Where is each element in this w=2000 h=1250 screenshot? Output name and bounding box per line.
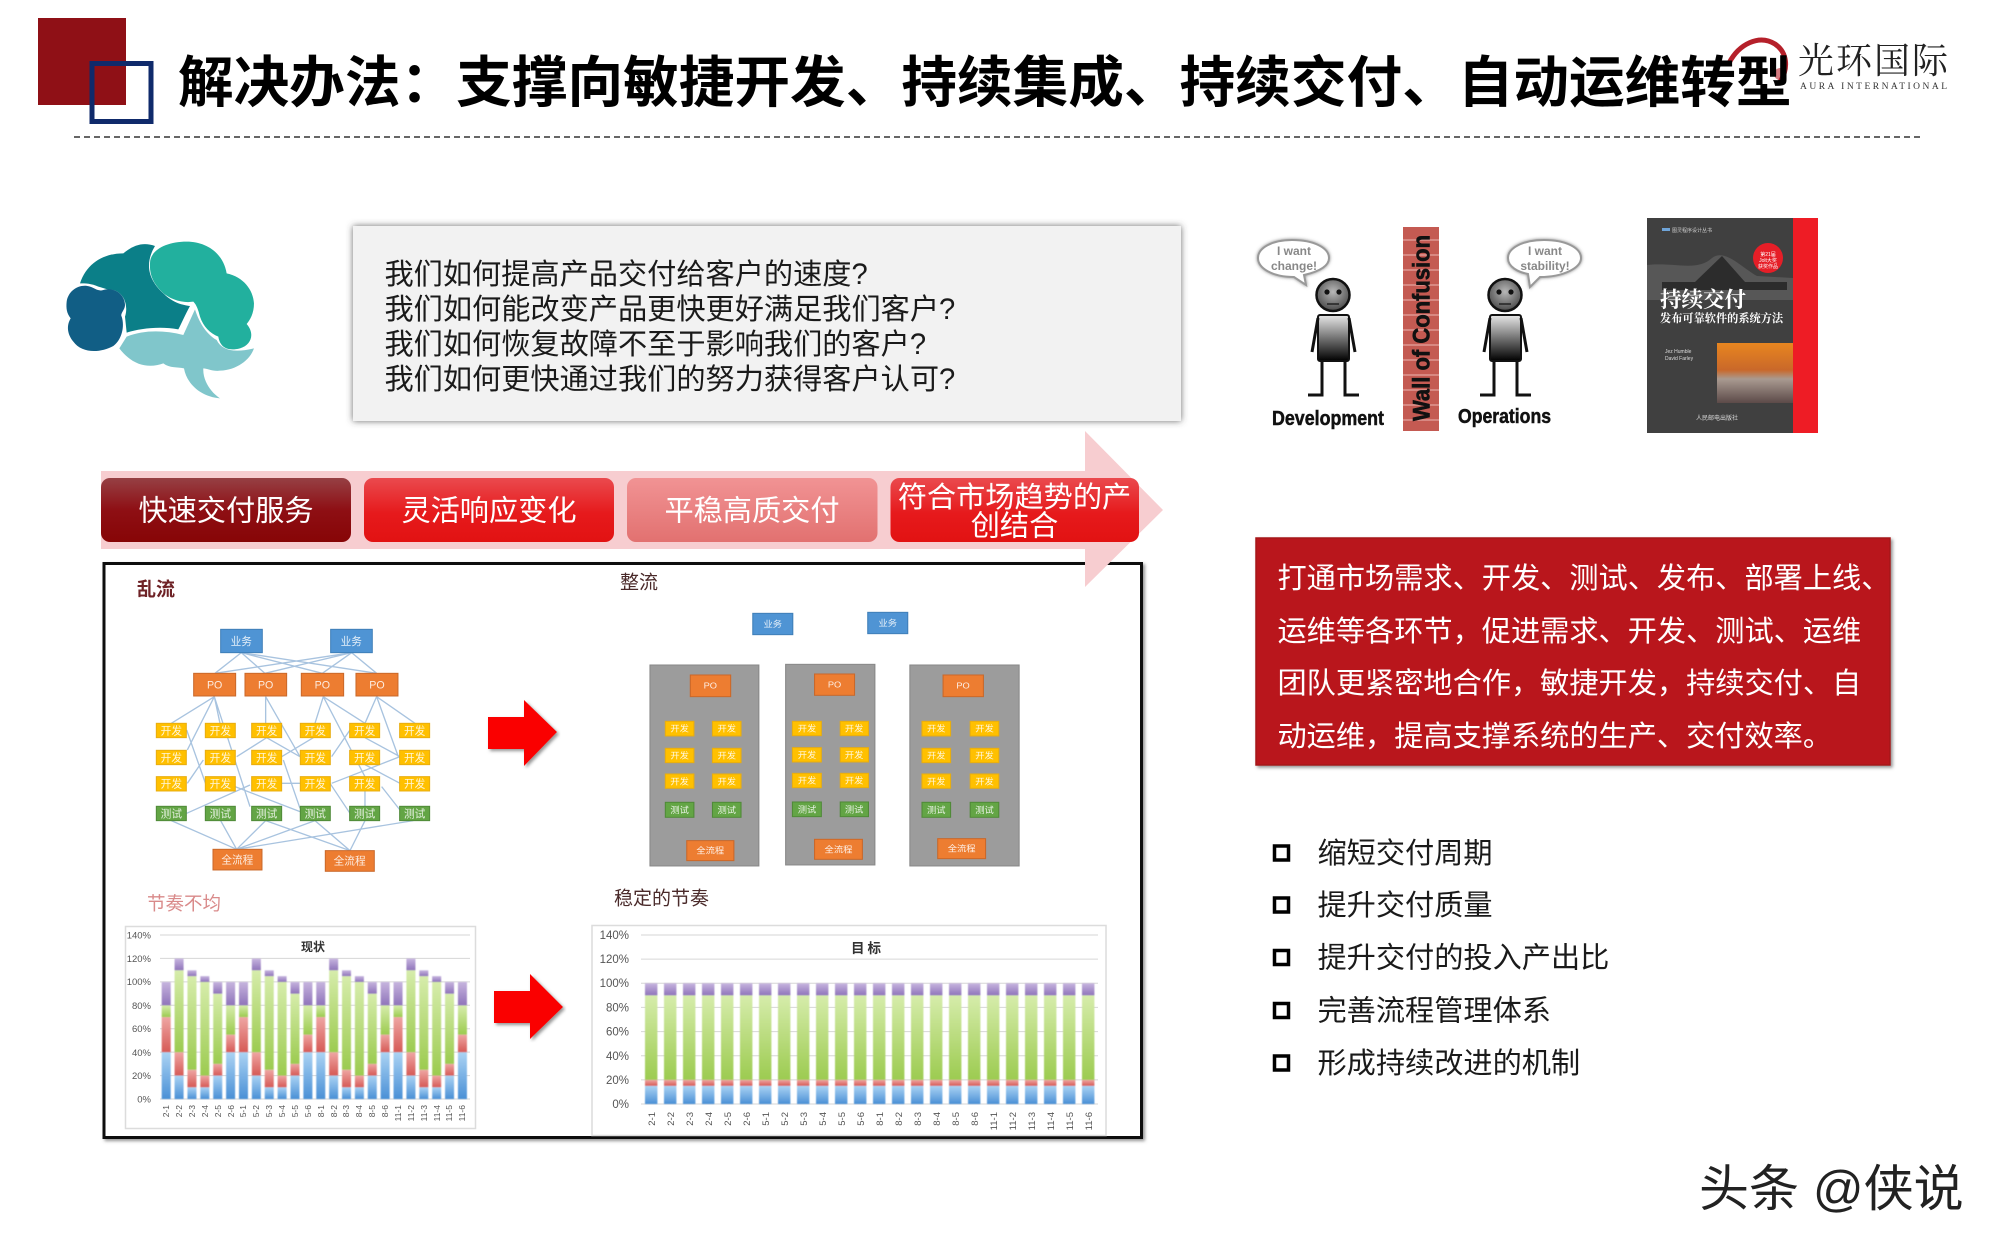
chart: target state: 2-4: [704, 1112, 715, 1126]
chart: current state: 120%: [127, 954, 152, 965]
team column 3: 开发: [975, 723, 994, 734]
chart: target state: 40%: [606, 1051, 629, 1063]
speech bubble: change: change!: [1271, 259, 1317, 273]
chart: target state: 60%: [606, 1026, 629, 1038]
team column 2: 测试: [798, 804, 816, 814]
team column 1: 开发: [670, 723, 689, 734]
chart: target state: 140%: [600, 930, 629, 942]
chaotic flow diagram: PO: [369, 680, 385, 692]
brick wall: [1403, 227, 1439, 431]
callout: solution summary: 团队更紧密地合作，敏捷开发，持续交付、自: [1278, 667, 1861, 700]
badge: [1753, 243, 1783, 273]
book cover: continuous delivery: 图灵程序设计丛书: [1672, 227, 1712, 234]
chart: target state: 8-5: [951, 1112, 962, 1126]
panel: flow and rhythm comparison: [104, 564, 1142, 1138]
chart: current state: 5-2: [251, 1105, 261, 1117]
team column 2: 开发: [798, 723, 816, 734]
chaotic flow diagram: 全流程: [221, 853, 254, 866]
ordered flow diagram: [650, 612, 1019, 866]
team column 3: PO: [956, 681, 970, 691]
chart: target state: [592, 926, 1106, 1136]
chart: current state: 2-4: [200, 1105, 210, 1117]
benefits list: [1274, 837, 1609, 1080]
chart: target state: 2-2: [666, 1112, 677, 1126]
step button: stable quality: 平稳高质交付: [664, 494, 840, 528]
team column 3: [910, 665, 1019, 866]
chart: current state: 80%: [132, 1001, 152, 1012]
question box: 我们如何恢复故障不至于影响我们的客户?: [384, 328, 926, 361]
chart: target state: 5-4: [818, 1112, 829, 1126]
step button: fast delivery: 快速交付服务: [138, 494, 314, 528]
chart: current state: 11-3: [419, 1105, 429, 1121]
chaotic flow diagram: 开发: [210, 778, 231, 791]
team column 3: 测试: [927, 804, 946, 815]
chart: target state: 11-4: [1046, 1112, 1057, 1130]
chart: target state: 5-2: [780, 1112, 791, 1126]
team column 1: 开发: [670, 776, 689, 786]
illustration: wall of confusion: Operations: [1458, 406, 1551, 428]
team column 1: 开发: [717, 776, 736, 786]
step button: market fit: [890, 478, 1139, 542]
book cover: continuous delivery: Jez Humble: [1665, 349, 1692, 355]
callout: solution summary: 运维等各环节，促进需求、开发、测试、运维: [1278, 615, 1861, 648]
chart: current state: 11-5: [444, 1105, 454, 1121]
chaotic flow diagram: 开发: [305, 778, 326, 791]
chart: current state: 40%: [132, 1048, 152, 1059]
arrow: chaos to order: [488, 700, 557, 766]
chart: target state: 8-2: [894, 1112, 905, 1126]
ordered flow diagram: 业务: [764, 618, 782, 629]
chart: target state: 8-3: [913, 1112, 924, 1126]
team column 2: 开发: [845, 775, 863, 786]
callout: solution summary: [1256, 538, 1890, 765]
team column 3: 全流程: [948, 843, 976, 854]
book cover: continuous delivery: [1647, 218, 1818, 433]
benefit 5: 形成持续改进的机制: [1318, 1047, 1580, 1080]
chaotic flow diagram: 测试: [404, 807, 426, 820]
chart: current state: 5-6: [303, 1105, 313, 1117]
chart: target state: 100%: [600, 978, 629, 990]
team column 2: PO: [828, 680, 841, 690]
speech bubble: change: [1258, 240, 1329, 285]
team column 1: PO: [704, 681, 717, 691]
ordered flow diagram: 业务: [878, 617, 897, 628]
cover photo: [1717, 343, 1793, 403]
benefit 2: 提升交付质量: [1318, 889, 1493, 922]
chart: target state: 11-6: [1084, 1112, 1095, 1130]
chart: current state: 11-6: [457, 1105, 467, 1121]
person: operations: [1480, 279, 1531, 395]
chart: current state: 5-5: [290, 1105, 300, 1117]
team column 3: 开发: [927, 776, 946, 786]
chart: target state: 2-5: [723, 1112, 734, 1126]
chaotic flow diagram: 开发: [404, 778, 426, 791]
chaotic flow diagram: PO: [315, 680, 330, 692]
step button: stable quality: [627, 478, 878, 542]
chaotic flow diagram: 开发: [210, 751, 231, 764]
chaotic flow diagram: 测试: [305, 807, 326, 820]
chaotic flow diagram: 测试: [256, 807, 278, 820]
question box: 我们如何能改变产品更快更好满足我们客户?: [384, 293, 955, 326]
chart: target state: 8-6: [970, 1112, 981, 1126]
chart: current state: 20%: [132, 1071, 152, 1082]
book cover: continuous delivery: Jolt大奖: [1759, 257, 1777, 264]
book cover: continuous delivery: 获奖作品: [1758, 263, 1778, 270]
book cover: continuous delivery: 第21届: [1760, 251, 1776, 258]
chart: current state: 现状: [301, 939, 325, 954]
team column 1: 开发: [717, 750, 736, 761]
chaotic flow diagram: 业务: [231, 635, 252, 648]
chart: current state: 11-4: [432, 1105, 442, 1121]
chaotic flow diagram: 开发: [256, 778, 278, 791]
chart: target state: 目标: [851, 941, 884, 956]
callout: solution summary: 打通市场需求、开发、测试、发布、部署上线、: [1278, 562, 1890, 595]
team column 2: 开发: [845, 723, 863, 734]
chart: target state: 2-3: [685, 1112, 696, 1126]
stable rhythm heading: 稳定的节奏: [614, 888, 709, 910]
bridge silhouette: [1647, 255, 1793, 300]
chaotic flow diagram: 开发: [354, 724, 376, 737]
logo: Aura International: AURA INTERNATIONAL: [1800, 82, 1947, 92]
chaotic flow diagram: 开发: [161, 724, 182, 737]
chart: target state: 5-5: [837, 1112, 848, 1126]
chart: current state: 11-2: [406, 1105, 416, 1121]
chart: current state: 5-3: [264, 1105, 274, 1117]
chart: target state: 80%: [606, 1002, 629, 1014]
team column 3: 开发: [927, 750, 946, 761]
book cover: continuous delivery: 持续交付: [1660, 283, 1747, 314]
chart: current state: 140%: [127, 930, 152, 942]
team column 3: 开发: [927, 723, 946, 734]
team column 1: [650, 665, 759, 866]
chart: target state: 5-6: [856, 1112, 867, 1126]
chaotic flow diagram: 测试: [354, 807, 376, 820]
chart: current state: 2-6: [226, 1105, 236, 1117]
chaotic flow diagram: 测试: [161, 807, 182, 820]
chart: target state: 11-3: [1027, 1112, 1038, 1130]
chart: target state: 11-1: [989, 1112, 1000, 1130]
speech bubble: stability: [1508, 240, 1581, 287]
step button: market fit: 创结合: [971, 510, 1058, 542]
chaotic flow diagram: 开发: [404, 751, 426, 764]
chart: current state: 8-2: [329, 1105, 339, 1117]
chaotic flow heading: 乱流: [137, 578, 175, 600]
team column 3: 开发: [975, 750, 994, 761]
step button: agile response: [364, 478, 614, 542]
ordered flow heading: 整流: [620, 572, 658, 594]
chaotic flow diagram: PO: [258, 680, 273, 692]
chart: current state: 8-3: [341, 1105, 351, 1117]
speech bubble: change: I want: [1277, 244, 1311, 258]
chaotic flow diagram: 开发: [354, 751, 376, 764]
chart: current state: 8-1: [316, 1105, 326, 1117]
chaotic flow diagram: 开发: [161, 751, 182, 764]
chaotic flow diagram: 业务: [341, 635, 362, 648]
benefit 3: 提升交付的投入产出比: [1318, 942, 1609, 974]
chart: current state: 100%: [127, 977, 152, 988]
chaotic flow diagram: PO: [207, 680, 222, 692]
chart: target state: 11-5: [1065, 1112, 1076, 1130]
chart: target state: 5-3: [799, 1112, 810, 1126]
chart: current state: 2-1: [161, 1105, 171, 1117]
question box: 我们如何提高产品交付给客户的速度?: [384, 258, 868, 291]
step button: agile response: 灵活响应变化: [401, 494, 577, 528]
chart: current state: 2-3: [187, 1105, 197, 1117]
question box: [353, 226, 1181, 421]
chart: target state: 20%: [606, 1075, 629, 1087]
person: development: [1308, 279, 1359, 395]
title: 解决办法：支撑向敏捷开发、持续集成、持续交付、自动运维转型: [178, 52, 1792, 114]
team column 3: 开发: [975, 776, 994, 786]
speech bubble: stability: stability!: [1520, 259, 1570, 273]
chaotic flow diagram: 开发: [210, 724, 231, 737]
arrow: current to target: [494, 974, 563, 1039]
chart: current state: 11-1: [393, 1105, 403, 1121]
team column 1: 全流程: [696, 845, 724, 856]
team column 1: 测试: [717, 804, 736, 815]
team column 1: 测试: [670, 804, 689, 815]
question box: 我们如何更快通过我们的努力获得客户认可?: [384, 363, 955, 396]
book cover: continuous delivery: David Farley: [1665, 356, 1694, 362]
step button: fast delivery: [101, 478, 351, 542]
chart: current state: [126, 926, 476, 1128]
chart: target state: 120%: [600, 954, 629, 966]
speech bubble: stability: I want: [1528, 244, 1562, 258]
brick wall: Wall of Confusion: [1408, 235, 1436, 421]
chart: target state: 2-1: [647, 1112, 658, 1126]
team column 3: 测试: [975, 804, 994, 815]
illustration: wall of confusion: [1258, 227, 1581, 431]
big pink arrow band: [101, 431, 1163, 587]
chaotic flow diagram: 测试: [210, 807, 231, 820]
chaotic flow diagram: [156, 629, 430, 871]
chaotic flow diagram: 开发: [256, 724, 278, 737]
callout: solution summary: 动运维，提高支撑系统的生产、交付效率。: [1278, 720, 1832, 753]
chart: current state: 2-5: [213, 1105, 223, 1117]
benefit 4: 完善流程管理体系: [1318, 994, 1551, 1028]
team column 1: 开发: [670, 750, 689, 761]
watermark: 头条 @侠说: [1699, 1161, 1964, 1217]
chaotic flow diagram: 开发: [354, 778, 376, 791]
logo: Aura International: 光环国际: [1798, 33, 1949, 84]
team column 2: 全流程: [825, 844, 852, 854]
chart: current state: 5-4: [277, 1105, 287, 1117]
team column 2: 测试: [845, 804, 863, 814]
chart: current state: 8-6: [380, 1105, 390, 1117]
team column 2: 开发: [798, 775, 816, 786]
book cover: continuous delivery: 人民邮电出版社: [1696, 414, 1738, 422]
chart: current state: 8-5: [367, 1105, 377, 1117]
chart: current state: 2-2: [174, 1105, 184, 1117]
team column 2: 开发: [798, 749, 816, 760]
logo arc: [1729, 40, 1786, 82]
team column 2: 开发: [845, 749, 863, 760]
team column 2: [786, 664, 875, 865]
book cover: continuous delivery: 发布可靠软件的系统方法: [1660, 310, 1784, 326]
step button: market fit: 符合市场趋势的产: [898, 481, 1131, 514]
chart: target state: 5-1: [761, 1112, 772, 1126]
chaotic flow diagram: 开发: [305, 724, 326, 737]
chart: target state: 11-2: [1008, 1112, 1019, 1130]
chaotic flow diagram: 开发: [404, 724, 426, 737]
chart: target state: 2-6: [742, 1112, 753, 1126]
chaotic flow diagram: 全流程: [334, 855, 366, 868]
decorative square: navy outline: [92, 64, 151, 122]
chaotic flow diagram: 开发: [305, 751, 326, 764]
chart: current state: 8-4: [354, 1105, 364, 1117]
chart: target state: 8-1: [875, 1112, 886, 1126]
team column 1: 开发: [717, 723, 736, 734]
chart: current state: 0%: [137, 1094, 152, 1106]
chart: current state: 5-1: [238, 1105, 248, 1117]
icon: brain: [66, 242, 254, 398]
decorative square: red: [38, 18, 126, 105]
illustration: wall of confusion: Development: [1272, 408, 1384, 430]
chaotic flow diagram: 开发: [161, 778, 182, 791]
benefit 1: 缩短交付周期: [1318, 837, 1493, 870]
chart: target state: 8-4: [932, 1112, 943, 1126]
chart: current state: 60%: [132, 1024, 152, 1035]
chart: target state: 0%: [612, 1099, 629, 1111]
chaotic flow diagram: 开发: [256, 751, 278, 764]
uneven rhythm heading: 节奏不均: [147, 893, 221, 914]
